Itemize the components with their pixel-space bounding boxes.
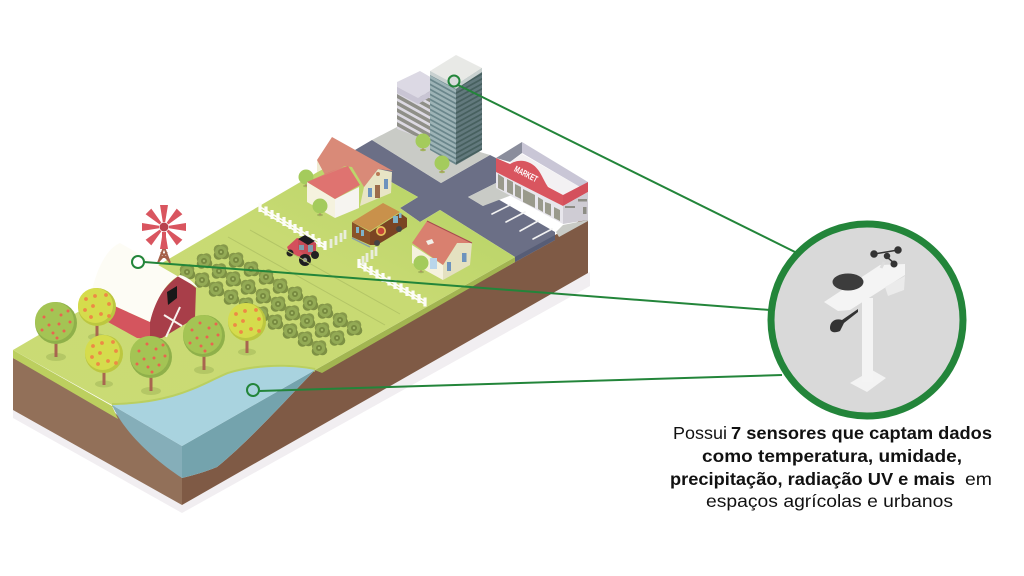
description text: precipitação, radiação UV e mais: [670, 469, 955, 489]
river right face: [182, 370, 315, 478]
ring: [771, 224, 963, 416]
market label: MARKET: [513, 164, 540, 184]
market facade: [496, 172, 563, 224]
ground shadow: [13, 272, 590, 513]
small house: [412, 221, 472, 280]
windmill tower: [158, 247, 170, 263]
river surface: [112, 367, 315, 446]
barn door cross: [164, 307, 182, 337]
soil right face: [182, 216, 588, 505]
radiation shield: [885, 276, 905, 296]
river bank: [112, 367, 315, 405]
barn side wall: [108, 303, 150, 339]
orchard trees: [35, 288, 266, 395]
marker: barn: [132, 256, 144, 268]
white fences: [260, 203, 425, 306]
short office building: [397, 71, 432, 142]
grass side edge: [13, 350, 118, 419]
river left face: [112, 405, 182, 478]
description text: em: [965, 469, 992, 489]
description text: 7 sensores que captam dados: [731, 423, 992, 443]
market sidewalk: [468, 183, 512, 206]
plaza pavement: [372, 127, 490, 183]
farmhouse wing roof: [307, 166, 360, 199]
soil left face: [13, 358, 182, 505]
red barn: [92, 243, 198, 339]
market roof: [510, 154, 580, 195]
farmhouse gable wall: [360, 169, 392, 206]
description text: Possui: [673, 423, 727, 443]
road: [345, 140, 555, 262]
farmhouse wing walls: [307, 182, 335, 218]
station base: [850, 370, 886, 392]
wind vane arm: [830, 309, 858, 332]
description text: [670, 423, 992, 511]
market windows: [498, 174, 560, 221]
sensor circle: [771, 224, 963, 416]
weather station: [824, 247, 905, 392]
description text: espaços agrícolas e urbanos: [706, 491, 953, 511]
cabbage crop rows: [180, 244, 362, 356]
field furrow lines: [228, 230, 400, 325]
farmhouse: [298, 137, 393, 218]
farmhouse door and windows: [375, 185, 380, 198]
windmill: [142, 205, 186, 263]
market building: [468, 142, 588, 237]
marker: tower: [448, 76, 460, 86]
connector lines: [132, 76, 797, 396]
market red sign: [496, 158, 563, 206]
anemometer: [871, 247, 901, 268]
market rear walls: [496, 142, 522, 162]
windmill blades: [142, 205, 186, 249]
marker: river: [247, 384, 259, 396]
isometric terrain block: [13, 140, 590, 513]
tractor: [286, 235, 319, 266]
plaza trees: [416, 134, 450, 173]
station head: [824, 264, 905, 311]
tall office tower: [430, 55, 482, 165]
delivery van: [352, 203, 407, 247]
market side wall: [563, 182, 588, 206]
rain gauge dome: [832, 274, 864, 290]
barn front: [150, 275, 196, 338]
barn roof: [92, 243, 198, 322]
description text: como temperatura, umidade,: [702, 446, 962, 466]
windmill pole: [162, 232, 166, 249]
station pole: [862, 298, 873, 382]
grass field surface: [13, 156, 515, 405]
parking lines: [492, 205, 552, 239]
barn hay door: [167, 286, 177, 305]
farmhouse main roof: [317, 137, 393, 187]
